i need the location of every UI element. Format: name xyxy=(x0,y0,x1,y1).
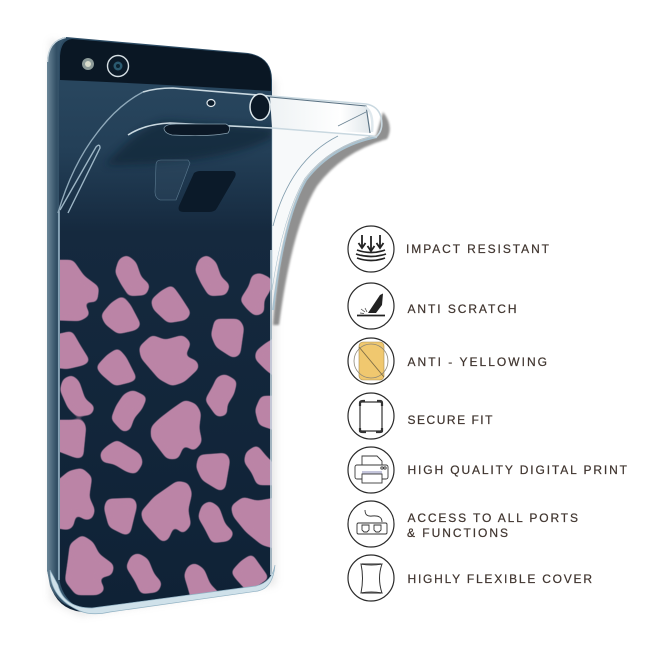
feature: anti scratch xyxy=(348,283,516,329)
case outer curve xyxy=(273,137,377,310)
phone left inner highlight xyxy=(58,210,60,580)
case bottom rim xyxy=(50,565,275,614)
feature: highly flexible cover xyxy=(348,555,592,601)
phone side edge xyxy=(47,37,78,608)
icon: bent cover xyxy=(348,555,394,601)
label: ANTI SCRATCH xyxy=(408,302,516,316)
phone with transparent case xyxy=(47,37,272,612)
feature: access to all ports xyxy=(348,501,578,547)
top lip window xyxy=(270,97,371,133)
icon: printer xyxy=(348,447,394,493)
icon: yellow case crossed out xyxy=(348,338,394,384)
feature: high quality digital print xyxy=(348,447,628,493)
transparent case flap xyxy=(58,88,390,325)
lip frame xyxy=(128,88,382,137)
label: two lines xyxy=(407,511,578,540)
label: two lines: & FUNCTIONS xyxy=(407,526,508,540)
case inner shadow xyxy=(105,121,272,165)
fingerprint sensor cutout xyxy=(179,171,236,212)
feature: impact resistant xyxy=(348,226,550,272)
icon: blade scratching surface xyxy=(348,283,394,329)
icon: phone case corners xyxy=(348,393,394,439)
lip outer highlight on left curve xyxy=(58,92,143,213)
black camera band xyxy=(60,39,271,91)
label: IMPACT RESISTANT xyxy=(406,242,550,256)
case camera cutout outline xyxy=(155,160,190,200)
label: HIGHLY FLEXIBLE COVER xyxy=(408,572,592,586)
case dark slot xyxy=(164,124,230,136)
icon: ports xyxy=(348,501,394,547)
inner wing curve line xyxy=(273,136,338,226)
phone right side highlight xyxy=(270,250,272,575)
flash xyxy=(82,58,94,70)
label: ANTI - YELLOWING xyxy=(408,355,547,369)
case lens hole xyxy=(250,94,270,120)
feature: anti yellowing xyxy=(348,338,547,384)
label: HIGH QUALITY DIGITAL PRINT xyxy=(408,463,628,477)
label: two lines: ACCESS TO ALL PORTS xyxy=(408,511,578,525)
icon: impact arrows xyxy=(348,226,394,272)
phone body xyxy=(47,37,272,612)
lip dark outline xyxy=(270,97,370,133)
feature: secure fit xyxy=(348,393,493,439)
case clear curved wing xyxy=(272,128,372,290)
case small hole xyxy=(207,100,215,106)
silver corner highlight xyxy=(48,38,66,62)
pink cow-print pattern xyxy=(50,255,280,602)
phone drop shadow xyxy=(50,40,276,616)
label: SECURE FIT xyxy=(408,413,493,427)
flap shadow xyxy=(273,112,390,325)
camera lens xyxy=(108,56,128,76)
side button bump xyxy=(60,145,100,213)
